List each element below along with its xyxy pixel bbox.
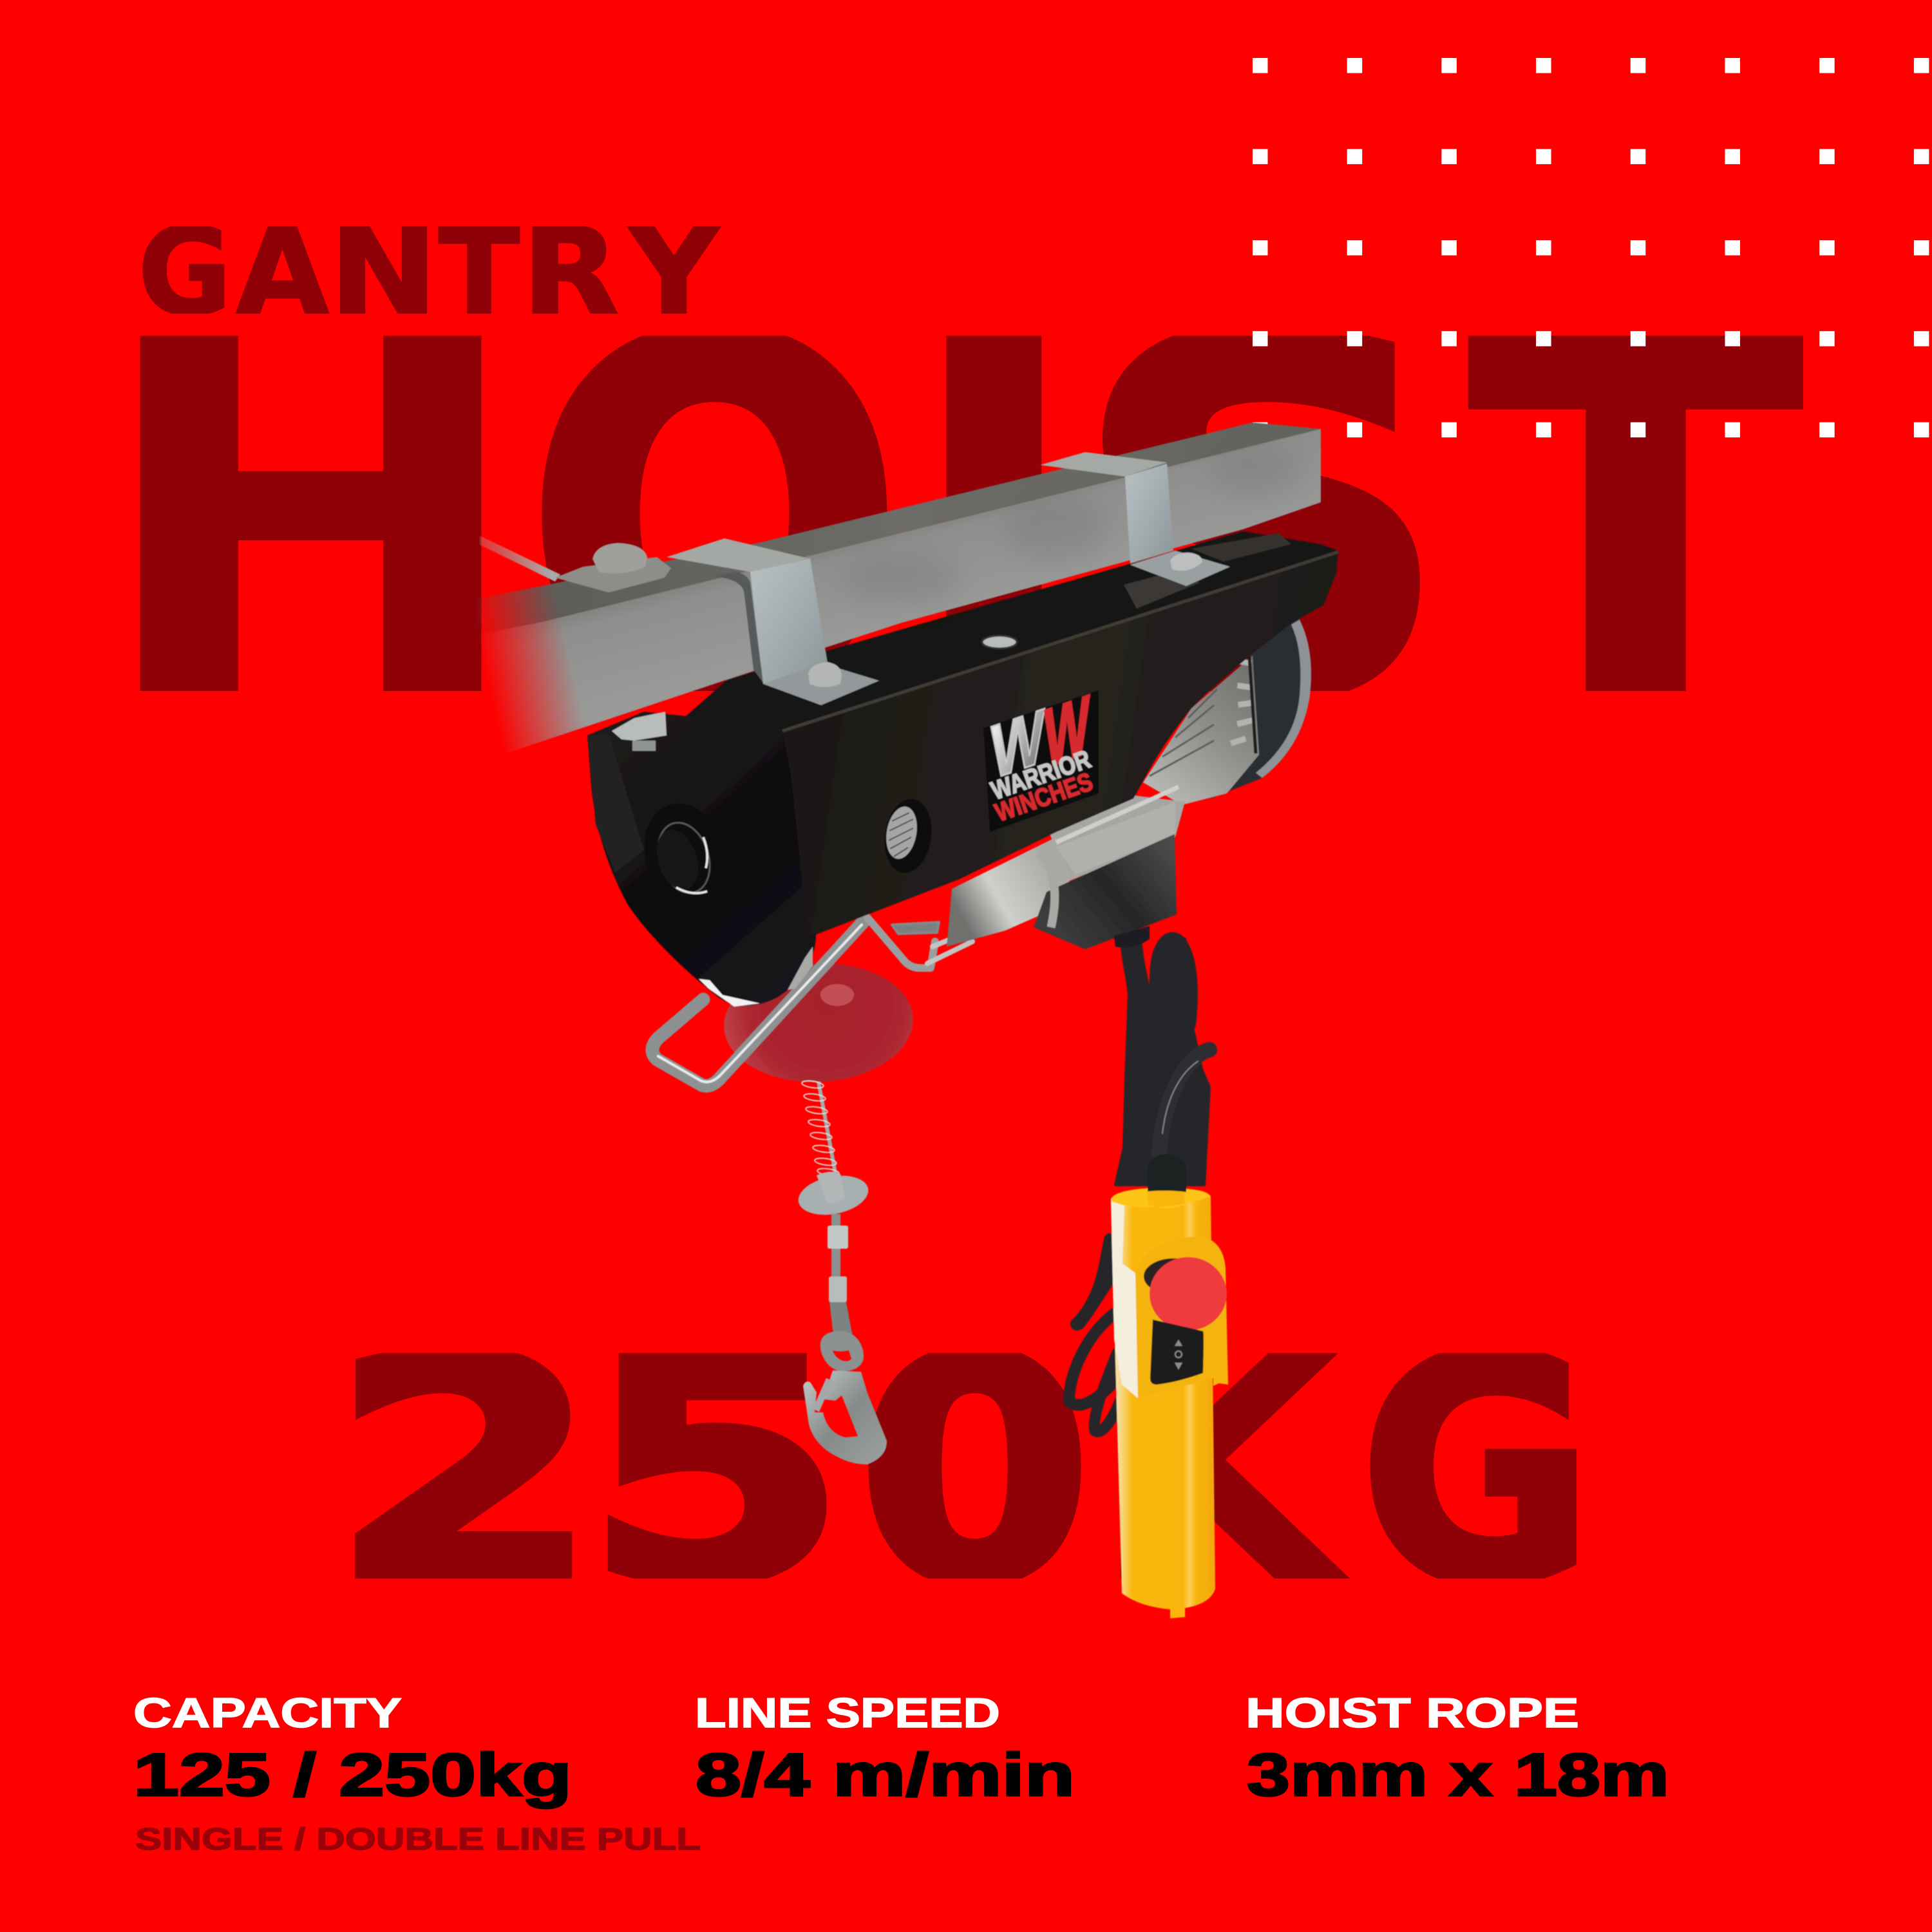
housing [587,531,1338,1007]
rail top face [477,422,1321,638]
title: gantry: G [138,202,232,343]
capacity headline: 250KG: 0 [857,1292,1092,1652]
clamp top plate [1040,452,1167,477]
title: hoist: T [1470,238,1804,806]
pendant top face [1112,1188,1211,1208]
upper ferrule [828,1226,848,1249]
mounting strap [480,536,560,582]
capacity label: CAPACITY [133,1689,402,1736]
fin lines [1150,689,1217,776]
clamp foot [763,663,879,705]
right rail clamp [1040,452,1230,586]
spec: hoist rope [1245,1689,1669,1808]
title: gantry: Y [627,202,721,343]
clamp top plate [667,538,808,572]
drum band [1038,851,1055,927]
lower bolt [612,712,667,751]
pendant control [1111,1188,1228,1618]
capacity headline: 250KG: G [1360,1292,1593,1652]
top face reflection near clamp [1124,567,1199,609]
logo silver W: W [991,692,1045,796]
title: hoist: I [900,238,1088,806]
black control box [1034,834,1177,949]
rocker arrows [1175,1340,1182,1370]
rim glint [1249,657,1256,753]
logo word: warrior: WARRIOR [988,745,1094,806]
lifting spring [801,1080,840,1180]
cable strain relief [1114,926,1150,948]
capacity note: SINGLE / DOUBLE LINE PULL [135,1823,701,1857]
bolt plate [555,557,671,592]
illustration: electric hoist [464,422,1338,1618]
logo word: winches: WINCHES [992,768,1096,828]
top screw [982,636,1017,649]
cap underside reflection [788,947,813,990]
motor teeth [1230,658,1254,746]
spec: line speed [695,1689,1075,1808]
motor [1143,620,1311,805]
washer ferrule [817,1171,845,1203]
clamp foot [1130,551,1230,586]
housing front face [782,552,1338,937]
wire drum [947,837,1070,947]
capacity headline: 250KG: 2 [330,1292,600,1652]
washer [795,1170,872,1220]
housing end cap [587,712,816,1005]
spec: capacity [133,1689,701,1857]
rope window bump [880,796,936,876]
rail mottling [844,444,1301,605]
hoist rope label: HOIST ROPE [1245,1689,1579,1736]
hook eye [820,1331,864,1371]
switch guard [1122,1236,1228,1398]
title: hoist: H [92,238,529,806]
pendant body [1111,1191,1215,1618]
cable gland [1148,1154,1186,1209]
title: gantry: T [439,202,520,343]
end cap flange [587,734,644,873]
capacity value: 125 / 250kg [133,1741,572,1808]
stopper hole [820,984,854,1006]
axle boss [631,793,741,920]
motor base plate [1050,795,1185,881]
clamp lip [715,572,763,683]
rope window [882,804,921,861]
logo label [983,690,1099,832]
lower ferrule [829,1276,847,1302]
top face reflection at end [1191,533,1291,562]
limit switch wire loop [652,918,972,1086]
top bolt [592,543,647,573]
line speed value: 8/4 m/min [696,1741,1075,1808]
title: hoist: S [1072,238,1452,806]
wire rope [831,1214,840,1285]
capacity headline: 250KG: 5 [584,1292,848,1652]
rocker switch [1150,1320,1204,1385]
logo red W: W [1045,678,1090,786]
control cables [1069,934,1209,1432]
left rail clamp [667,538,879,705]
title: gantry: R [522,202,620,343]
load stopper disc [721,958,916,1087]
title: hoist: O [526,238,904,806]
end cap glint [699,979,760,1007]
guard white side [1111,1201,1138,1398]
axle gloss [676,837,707,893]
grey terminal box [1056,802,1175,875]
line speed label: LINE SPEED [695,1689,1000,1736]
hoist rope value: 3mm x 18m [1247,1741,1669,1808]
capacity headline: 250KG: K [1091,1292,1352,1652]
front rim [782,552,1338,731]
axle button [650,816,718,900]
hook body [803,1370,887,1464]
clamp bolt [808,662,842,687]
dot grid pattern [1253,58,1929,437]
title: gantry: A [236,202,329,343]
emergency stop button [1150,1257,1227,1331]
clamp strap [750,558,828,684]
title: gantry: N [329,202,438,343]
motor rim highlight [1256,620,1311,778]
clamp strap [1125,464,1173,564]
cooling fins [1143,656,1259,805]
wire thimble [829,1302,853,1346]
motor end cap [1191,620,1311,799]
housing top face [686,531,1338,731]
rail front face [464,429,1321,766]
hook latch [816,1379,829,1410]
wire rope and hook [795,1170,887,1464]
square rail [464,422,1321,766]
guide rod [1056,787,1179,842]
clamp bolt [1170,553,1202,571]
button recess [1144,1258,1203,1294]
warrior winches logo [983,678,1099,832]
rope strands [889,813,913,857]
